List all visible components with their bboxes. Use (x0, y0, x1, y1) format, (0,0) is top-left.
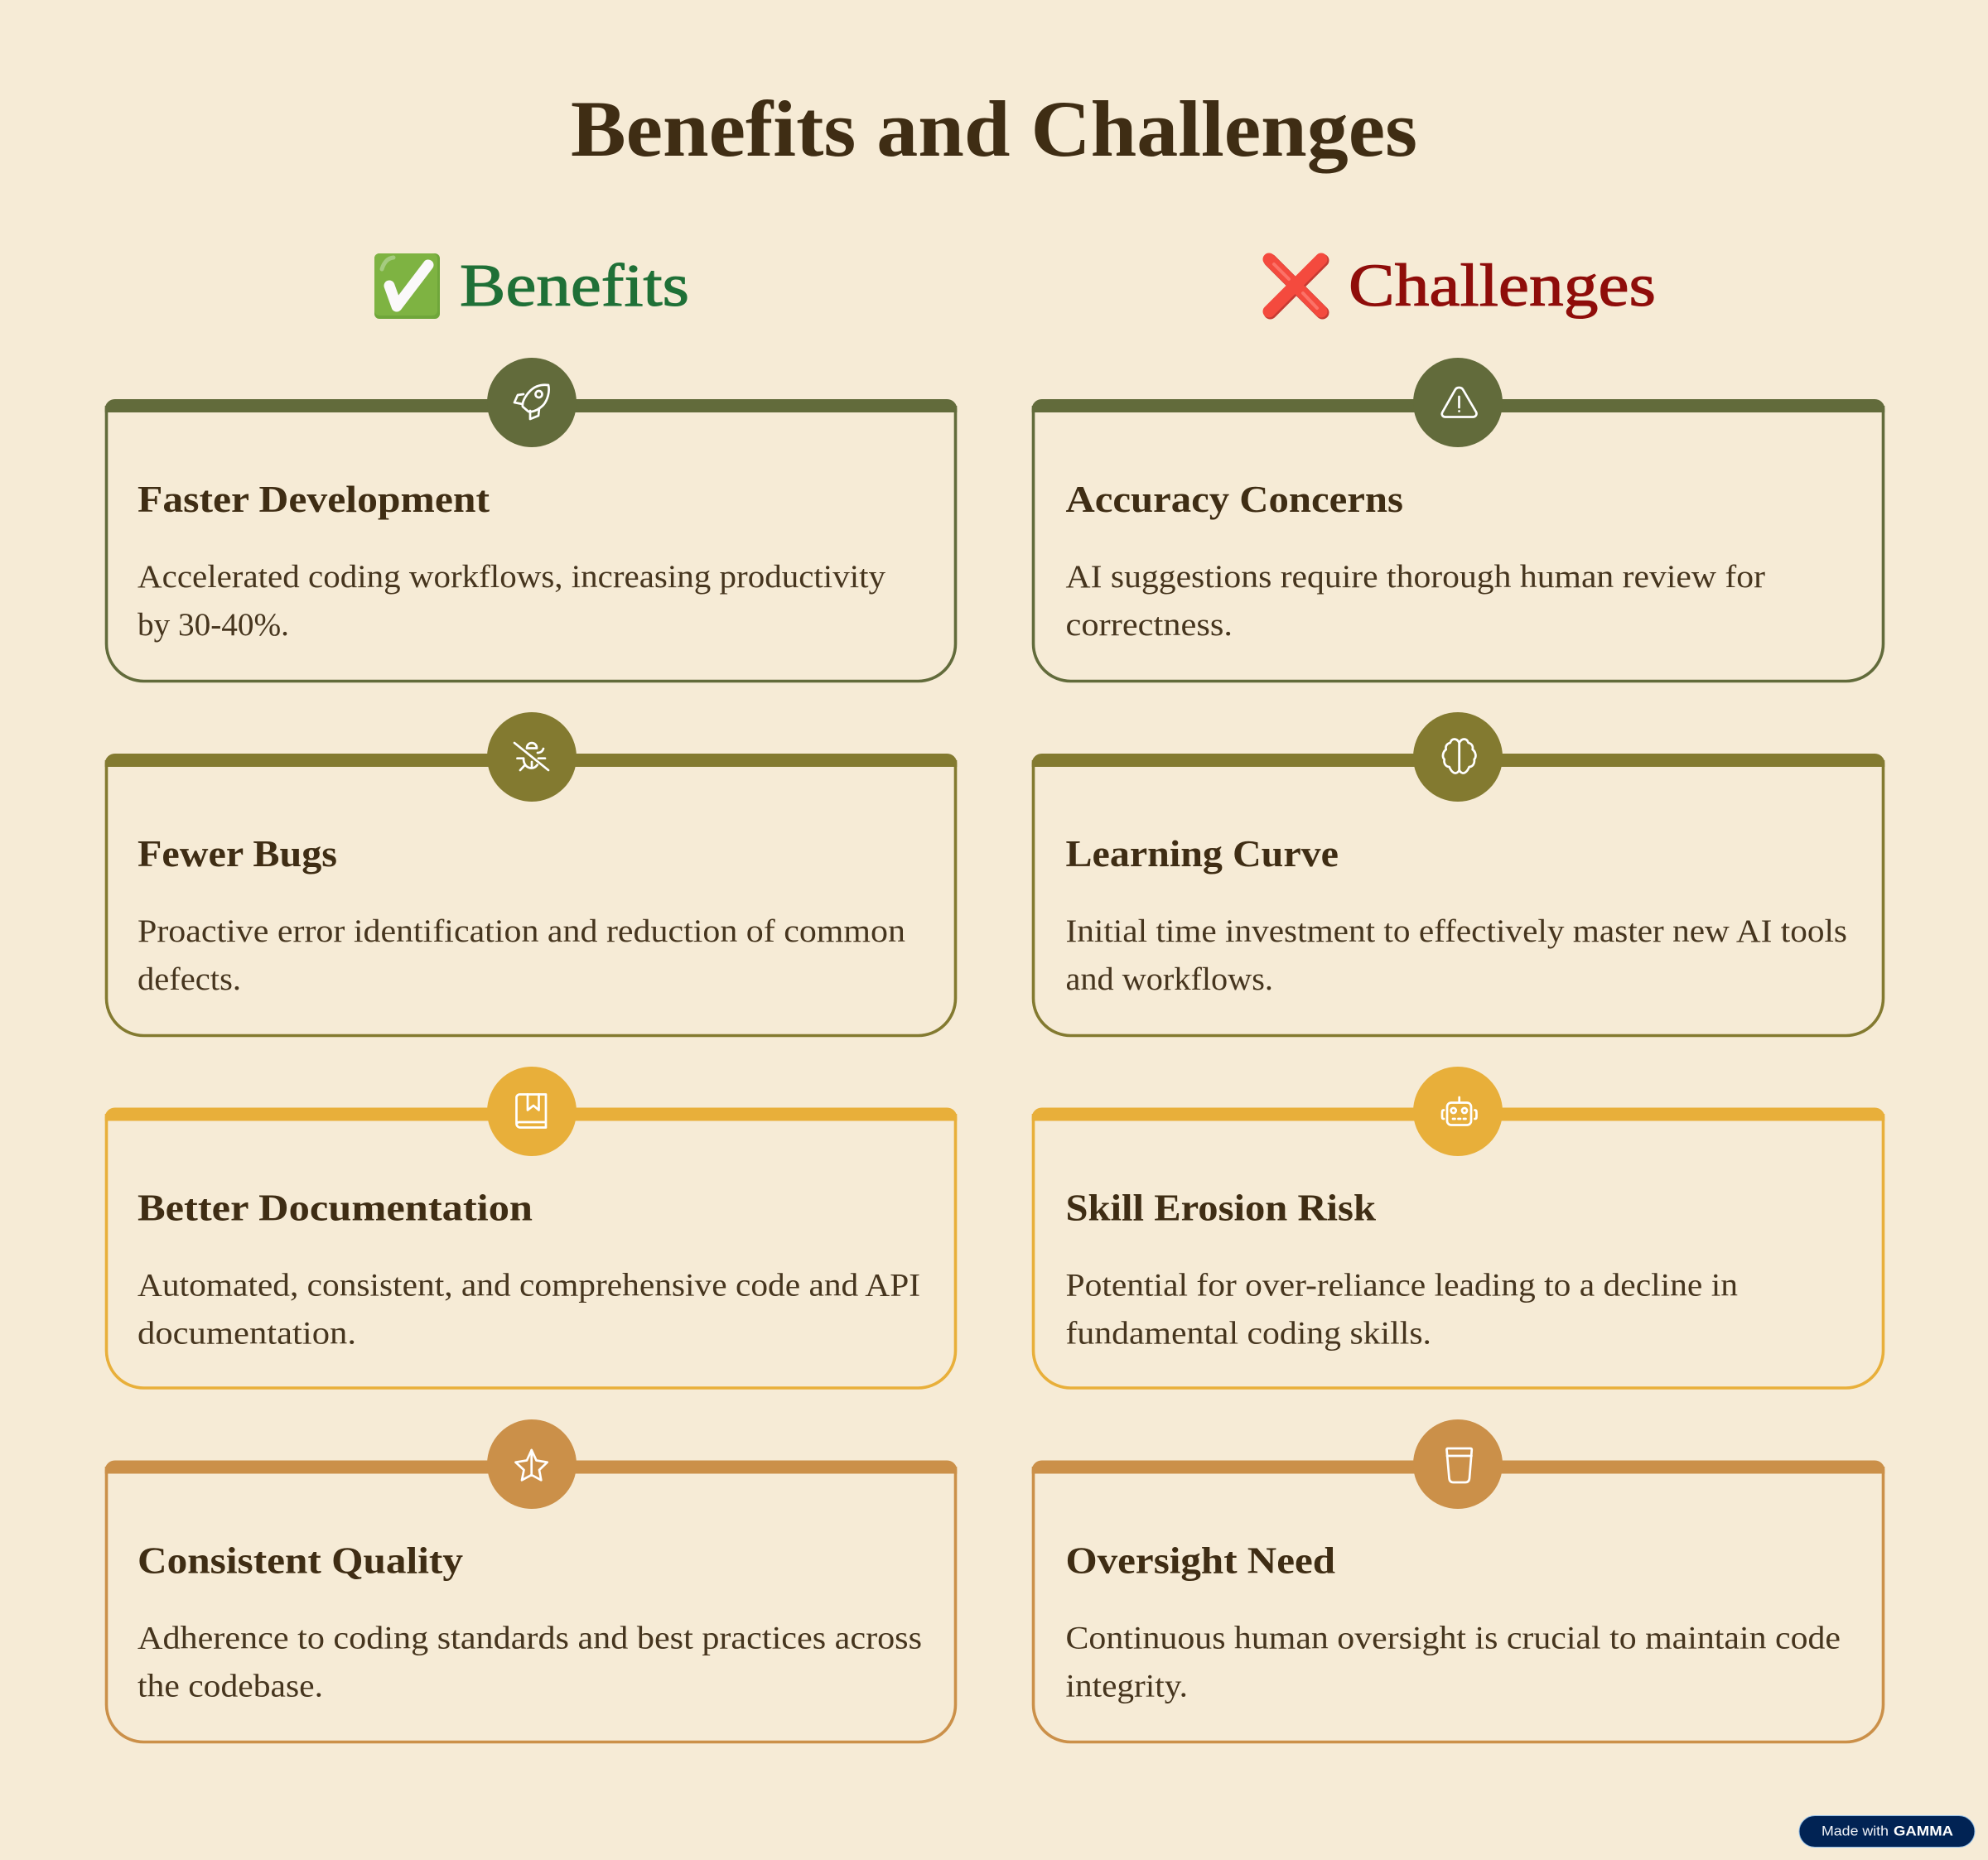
panel: Consistent Quality: Consistent Quality (138, 1540, 464, 1582)
panel: Accuracy Concerns (1032, 358, 1884, 681)
panel: Better Documentation: documentation. (138, 1315, 356, 1352)
heading: challenges (1269, 252, 1656, 319)
panel: Skill Erosion Risk: Skill Erosion Risk (1065, 1188, 1376, 1229)
panel: Accuracy Concerns: Accuracy Concerns (1065, 479, 1403, 520)
icon: rocket (487, 358, 577, 447)
badge: made with gamma (1799, 1815, 1975, 1847)
panel: Skill Erosion Risk: Potential for over-reliance leading to a decline in (1065, 1267, 1738, 1303)
panel: Consistent Quality (105, 1419, 957, 1742)
icon: robot (1413, 1067, 1503, 1156)
panel: Better Documentation (105, 1067, 957, 1388)
panel: Learning Curve: and workflows. (1065, 961, 1273, 997)
icon: brain (1413, 712, 1503, 802)
badge: made with gamma: GAMMA (1894, 1824, 1953, 1838)
badge: made with gamma: Made with (1822, 1824, 1889, 1838)
icon: cup (1413, 1419, 1503, 1509)
panel: Oversight Need: Oversight Need (1065, 1540, 1335, 1582)
icon: green check mark (374, 253, 440, 319)
icon: red cross mark (1269, 259, 1322, 313)
panel: Faster Development: by 30-40%. (138, 607, 289, 643)
panel: Skill Erosion Risk (1032, 1067, 1884, 1388)
panel: Oversight Need (1032, 1419, 1884, 1742)
panel: Oversight Need: Continuous human oversight is crucial to maintain code (1065, 1620, 1841, 1656)
heading: benefits: Benefits (460, 252, 689, 319)
panel: Consistent Quality: Adherence to coding standards and best practices across (138, 1620, 922, 1656)
panel: Fewer Bugs (105, 712, 957, 1035)
panel: Faster Development: Accelerated coding workflows, increasing productivity (138, 559, 886, 595)
heading: benefits (374, 252, 689, 319)
panel: Faster Development: Faster Development (138, 479, 490, 520)
panel: Better Documentation: Automated, consistent, and comprehensive code and API (138, 1267, 920, 1303)
panel: Learning Curve: Initial time investment to effectively master new AI tools (1065, 913, 1847, 949)
icon: book with bookmark (487, 1067, 577, 1156)
panel: Better Documentation: Better Documentation (138, 1188, 533, 1229)
icon: bug off (487, 712, 577, 802)
panel: Skill Erosion Risk: fundamental coding skills. (1065, 1315, 1431, 1352)
panel: Faster Development (105, 358, 957, 681)
panel: Fewer Bugs: defects. (138, 961, 241, 997)
panel: Oversight Need: integrity. (1065, 1668, 1188, 1704)
panel: Fewer Bugs: Fewer Bugs (138, 833, 337, 875)
panel: Fewer Bugs: Proactive error identification and reduction of common (138, 913, 905, 949)
panel: Accuracy Concerns: AI suggestions require thorough human review for (1065, 559, 1765, 595)
title: Benefits and Challenges (571, 84, 1417, 173)
panel: Consistent Quality: the codebase. (138, 1668, 323, 1704)
icon: half star (487, 1419, 577, 1509)
panel: Accuracy Concerns: correctness. (1065, 607, 1233, 643)
heading: challenges: Challenges (1349, 252, 1656, 319)
panel: Learning Curve: Learning Curve (1065, 833, 1339, 875)
panel: Learning Curve (1032, 712, 1884, 1035)
icon: warning triangle (1413, 358, 1503, 447)
